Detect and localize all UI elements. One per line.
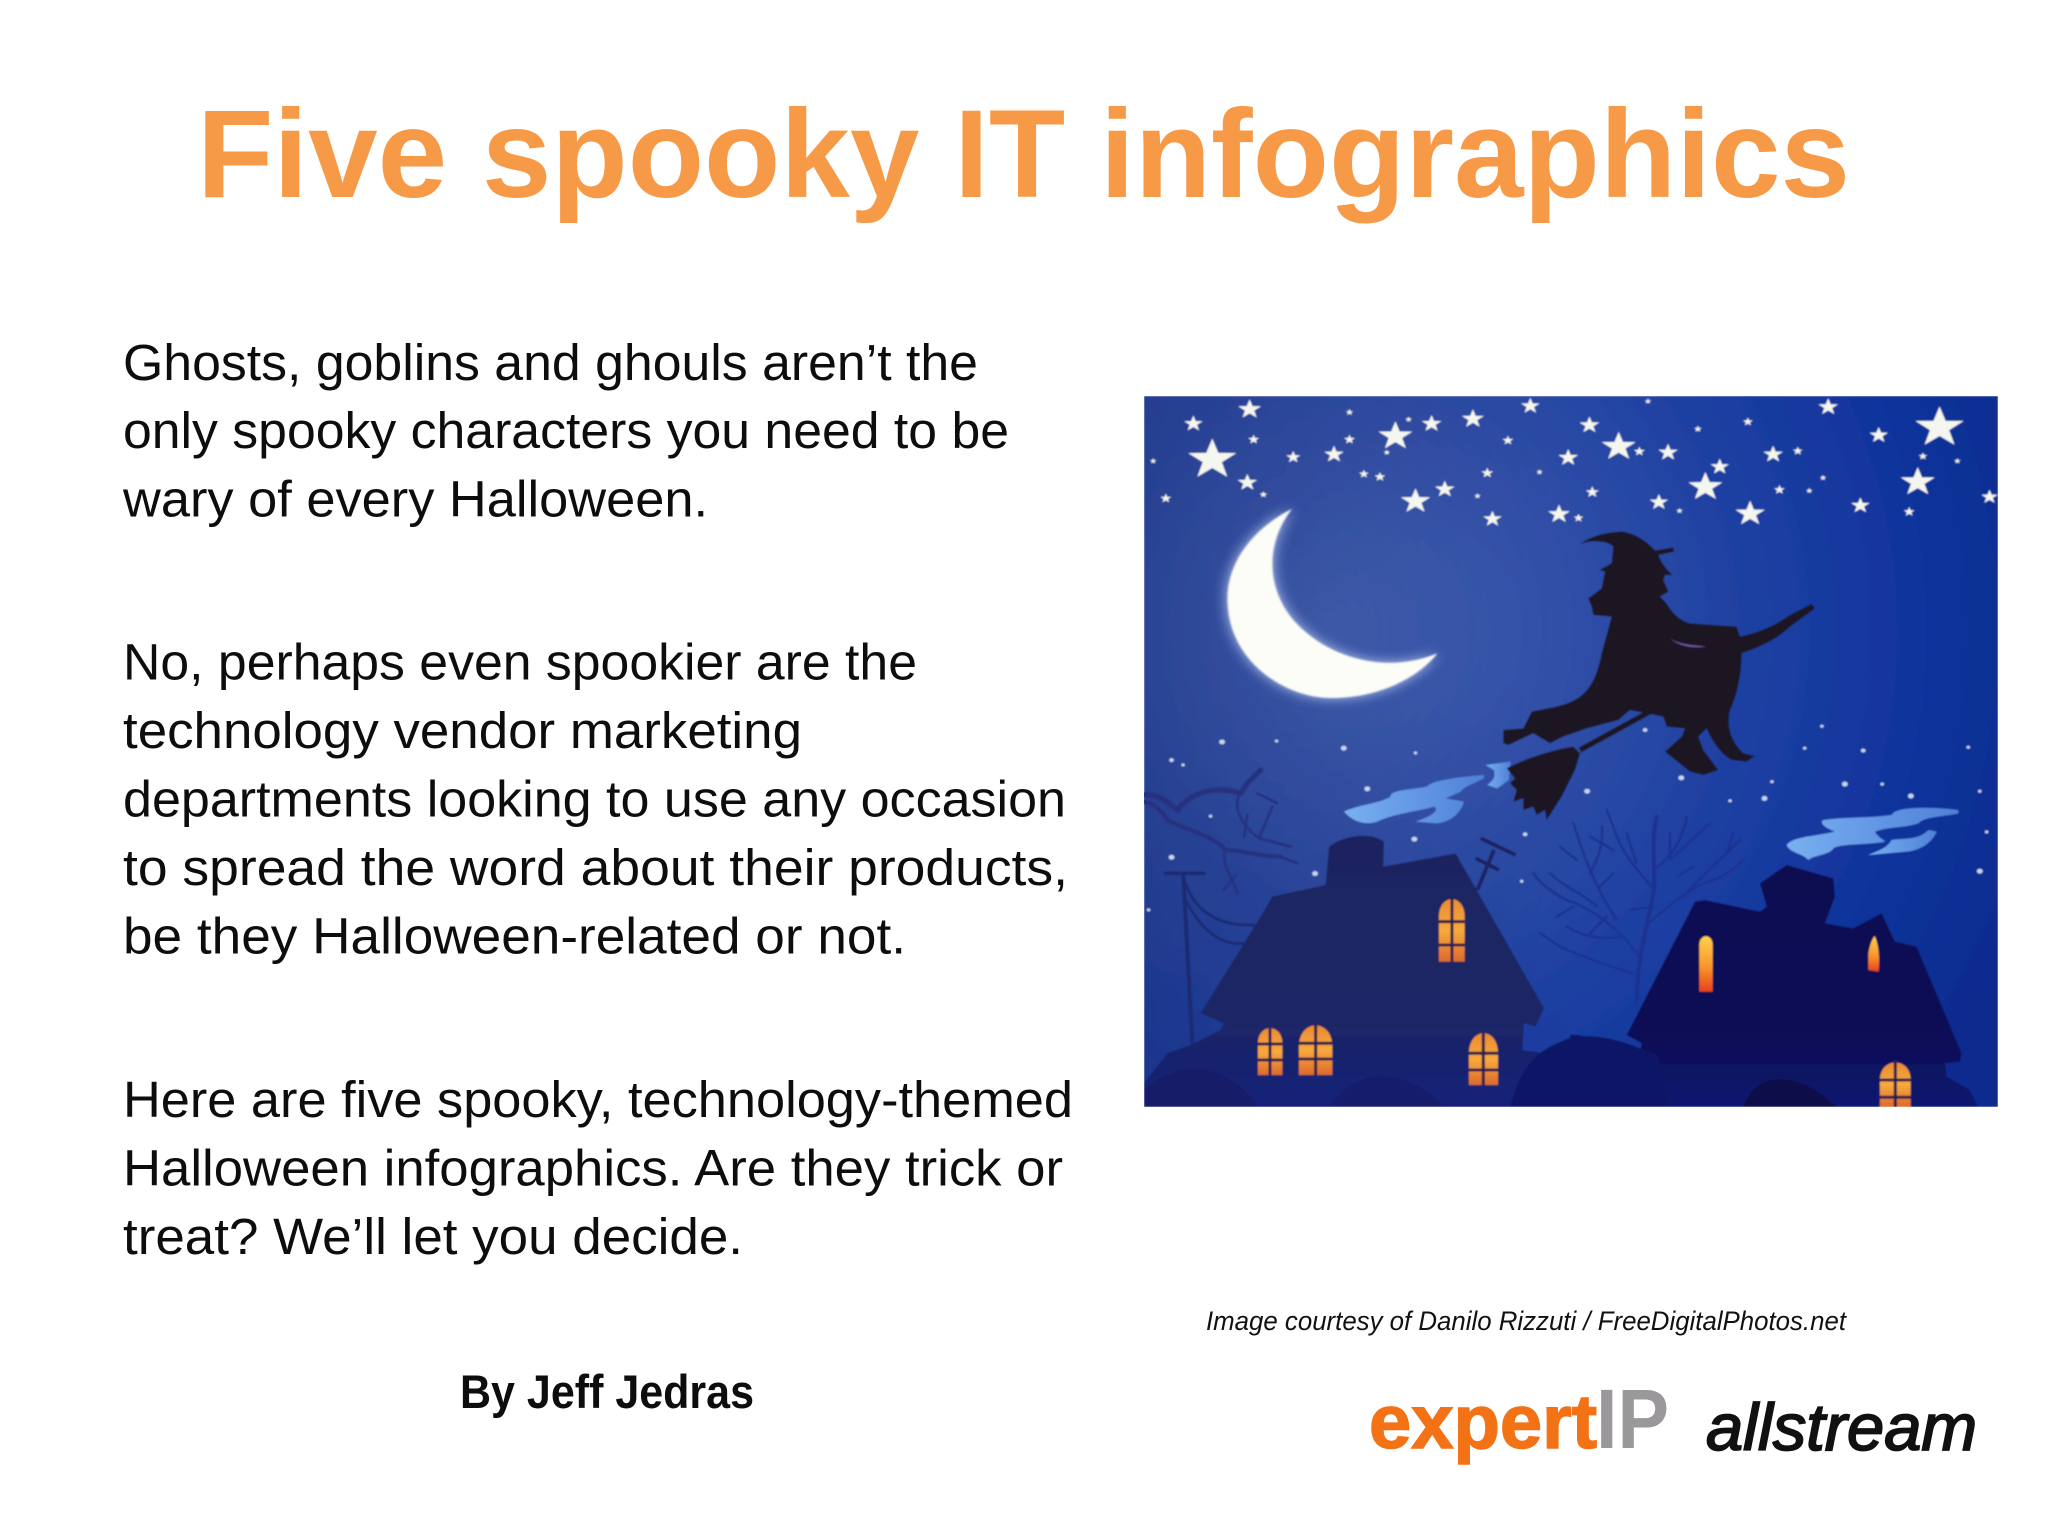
witch on broomstick — [1503, 532, 1815, 820]
text block: vendor paragraph: technology vendor marketing — [123, 702, 802, 759]
text block: vendor paragraph: No, perhaps even spookier are the — [123, 634, 917, 690]
text block: closing paragraph: Halloween infographics. Are they trick or — [123, 1140, 1063, 1196]
text block: vendor paragraph — [123, 634, 1068, 964]
logo: allstream: allstream — [1706, 1390, 1977, 1464]
crescent moon — [1228, 509, 1437, 698]
logo: expertIP: expert — [1369, 1380, 1597, 1465]
far house — [1570, 865, 1978, 1107]
text block: intro paragraph: only spooky characters you need to be — [123, 402, 1009, 459]
logo: expertIP — [1369, 1372, 1669, 1466]
text block: closing paragraph: Here are five spooky, technology-themed — [123, 1071, 1073, 1128]
telegraph pole — [1166, 873, 1254, 1043]
image caption: Image courtesy of Danilo Rizzuti / FreeDigitalPhotos.net — [1206, 1306, 1847, 1336]
logo: expertIP: IP — [1596, 1372, 1669, 1466]
text block: vendor paragraph: departments looking to use any occasion — [123, 770, 1066, 828]
gnarled tree on the left — [1144, 770, 1297, 893]
near house — [1144, 836, 1671, 1107]
night sky background — [1144, 396, 1998, 1107]
smoke from right chimney — [1787, 808, 1958, 860]
smoke from left chimney — [1344, 762, 1511, 823]
text block: intro paragraph: Ghosts, goblins and ghouls aren’t the — [123, 334, 978, 391]
text block: closing paragraph — [123, 1071, 1073, 1265]
small distant stars — [1147, 725, 1988, 911]
byline: By Jeff Jedras — [460, 1365, 754, 1418]
bare tree in the centre — [1533, 810, 1743, 1000]
title: Five spooky IT infographics — [197, 85, 1850, 224]
text block: vendor paragraph: to spread the word about their products, — [123, 839, 1068, 896]
text block: intro paragraph: wary of every Halloween. — [122, 470, 708, 528]
text block: intro paragraph — [122, 334, 1009, 528]
illustration: witch flying over houses at night — [1144, 396, 1998, 1107]
stars — [1150, 398, 1998, 526]
text block: vendor paragraph: be they Halloween-related or not. — [123, 908, 906, 964]
text block: closing paragraph: treat? We’ll let you decide. — [123, 1208, 743, 1265]
